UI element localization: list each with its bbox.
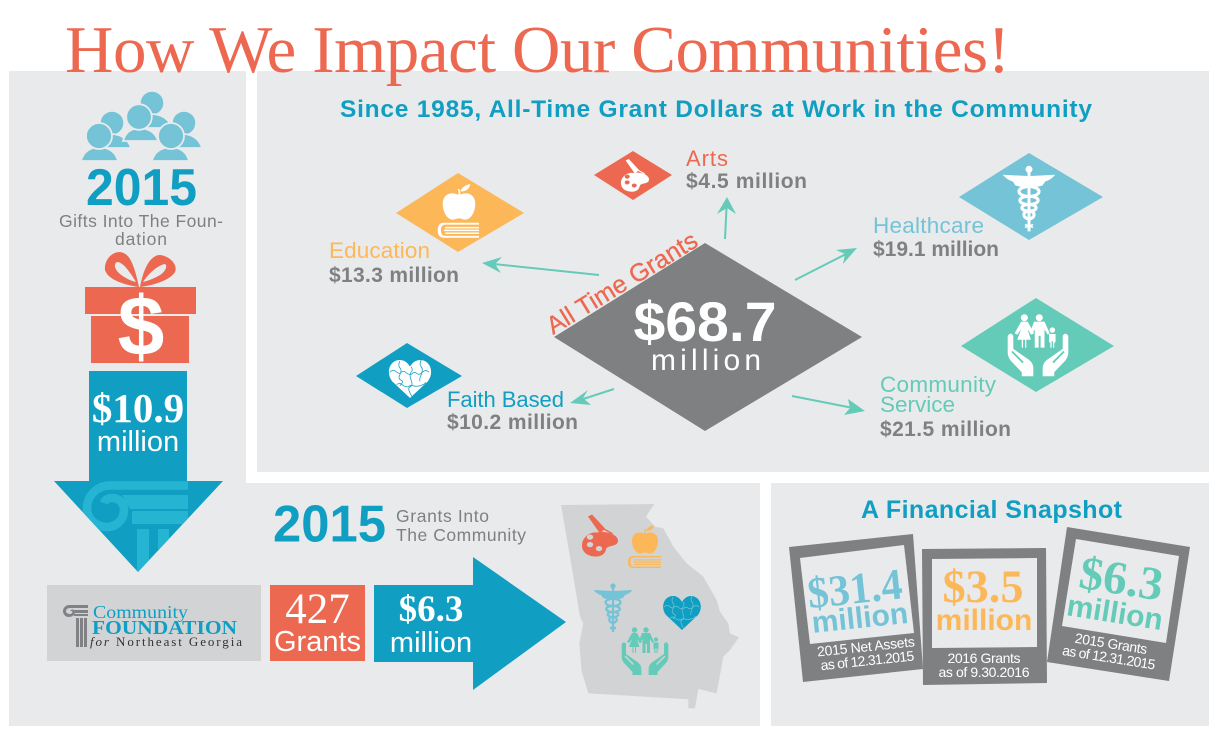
icon: map apple and book [628,525,661,568]
category: faith based: Faith Based [447,387,564,412]
panel: financial snapshot [771,483,1209,726]
text: gifts into the foundation: dation [115,229,167,249]
central diamond: 68.7 million [554,243,862,431]
card: 2015 net assets: $31.4 [805,559,905,618]
card: 2015 grants: as of 12.31.2015 [1061,642,1157,673]
callout: 427 grants: Grants [274,626,361,658]
arrow: to arts [717,197,736,239]
arrow: to education [482,257,599,275]
category: faith based: $10.2 million [447,411,578,434]
icon: family in hands [1008,314,1068,376]
category: education: Education [329,238,430,263]
category: healthcare: Healthcare [873,213,984,238]
card: 2016 grants: $3.5 [942,561,1024,613]
icon: map puzzle heart [663,596,701,630]
category: arts: $4.5 million [686,170,807,193]
icon: map family in hands [622,627,668,675]
arrow: gifts down arrow [54,371,223,574]
card: 2016 grants [922,548,1047,685]
icon: gift box with dollar sign [85,252,196,373]
category: community service: $21.5 million [880,418,1011,441]
heading: all-time grant dollars: Since 1985, All-Time Grant Dollars at Work in the Community [340,96,1092,123]
category: arts: Arts [686,146,728,171]
icon: puzzle heart [389,360,431,398]
text: all time grants: All Time Grants [542,226,703,340]
category: arts [594,146,807,200]
arrow: 6.3 million grants: $6.3 [399,589,463,630]
icon: map caduceus [594,583,632,632]
category: community service: Service [880,392,955,417]
card: 2015 grants: $6.3 [1076,547,1167,612]
icon: column motif [87,486,188,574]
panel: left and bottom grants panel [9,71,760,726]
icon: caduceus [1003,166,1055,231]
logo: community foundation: FOUNDATION [92,617,238,639]
card: 2015 net assets: 2015 Net Assets [816,633,915,660]
logo: community foundation: for Northeast Georgia [90,634,242,649]
icon: apple and book [438,184,479,238]
text: gifts into the foundation [59,211,223,249]
icon: palette [621,159,649,192]
central diamond: 68.7 million: million [651,344,761,377]
card: 2015 grants: million [1065,589,1165,637]
card: 2016 grants: 2016 Grants [948,650,1020,666]
card: 2015 grants [1047,527,1190,681]
category: education [329,173,524,287]
arrow: to healthcare [795,248,857,280]
card: 2016 grants: million [936,604,1032,637]
arrow: 6.3 million grants: million [390,627,472,659]
category: healthcare [873,153,1103,261]
arrow: to community service [792,396,865,415]
callout: 427 grants [270,585,365,661]
title: How We Impact Our Communities! [65,13,1010,87]
text: grants into the community: Grants Into [396,506,489,526]
text: gifts into the foundation: Gifts Into The Foun- [59,211,223,231]
arrow: gifts down arrow: $10.9 [92,385,184,431]
category: faith based [356,343,578,434]
card: 2015 net assets: million [810,597,910,640]
logo: community foundation: Community [93,602,188,622]
heading: 2015 grants: 2015 [273,496,386,554]
heading: 2015 gifts: 2015 [86,159,197,217]
central diamond: 68.7 million: $68.7 [634,290,776,353]
category: community service: Community [880,372,997,397]
card: 2015 net assets [789,534,923,682]
card: 2015 net assets: as of 12.31.2015 [820,647,915,673]
card: 2016 grants: as of 9.30.2016 [938,664,1030,680]
map: georgia [561,504,739,708]
icon: gift box with dollar sign: $ [118,279,164,373]
category: education: $13.3 million [329,264,459,287]
category: community service [880,298,1114,441]
category: healthcare: $19.1 million [873,238,999,261]
arrow: 6.3 million grants [374,557,566,690]
callout: 427 grants: 427 [285,586,350,633]
logo: community foundation [47,585,261,661]
icon: map palette [582,514,618,556]
icon: group of people [81,91,202,161]
arrow: gifts down arrow: million [97,426,179,458]
text: grants into the community [396,506,526,545]
icon: logo column [63,605,88,647]
arrow: to faith based [570,389,614,405]
text: grants into the community: The Community [396,525,526,545]
panel: all-time grants [257,71,1209,472]
card: 2015 grants: 2015 Grants [1074,630,1148,657]
heading: financial snapshot: A Financial Snapshot [861,496,1123,524]
